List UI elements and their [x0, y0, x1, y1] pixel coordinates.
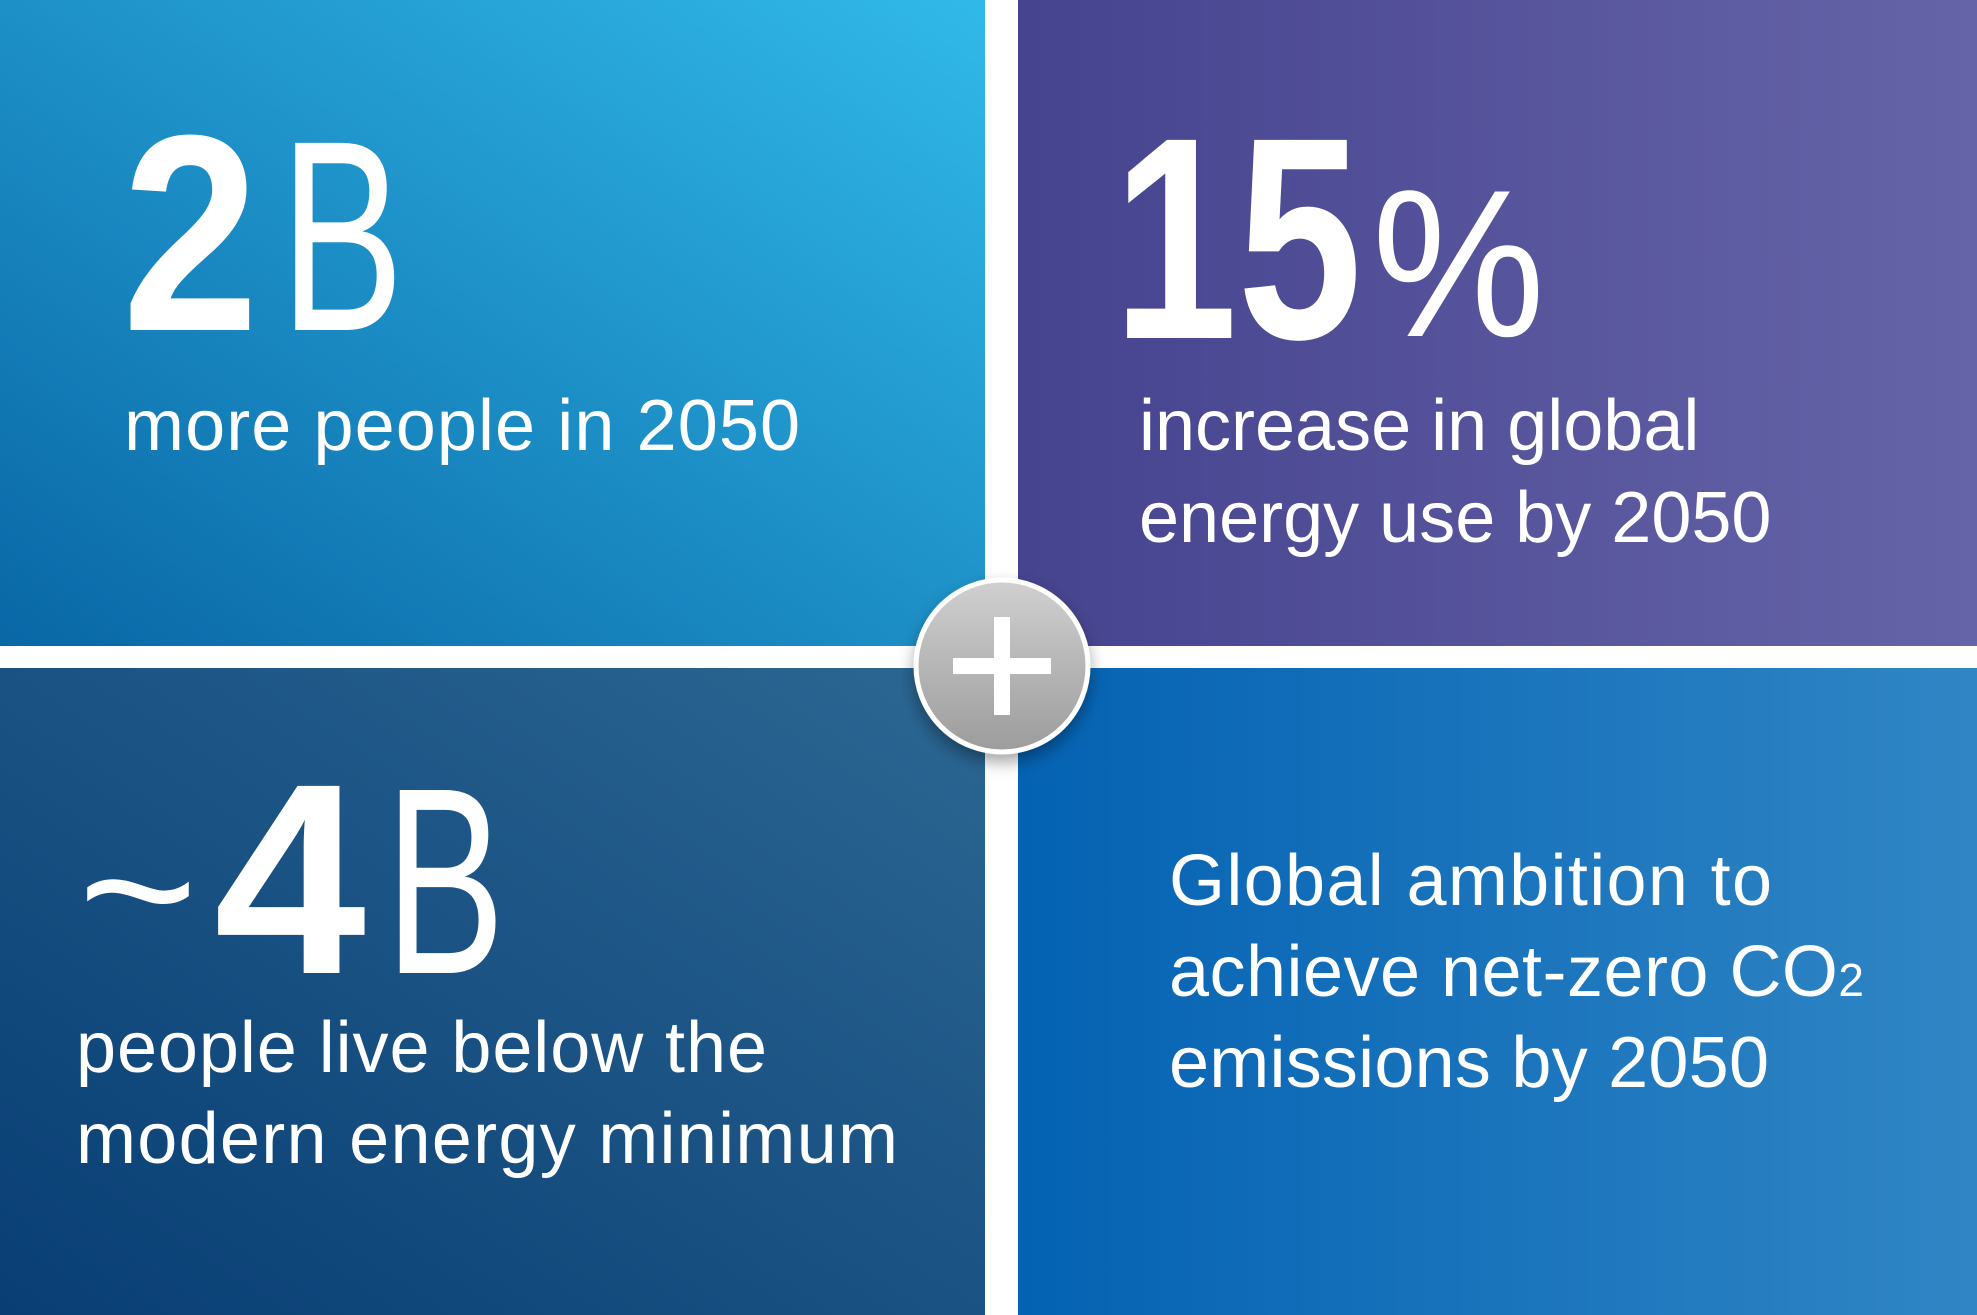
headline: 15%: %	[1372, 146, 1545, 381]
icon: plus circle	[916, 580, 1088, 752]
headline: ~4B: 4	[214, 727, 368, 1031]
text: people live below: modern energy minimum	[76, 1099, 898, 1179]
text: increase in global energy use: energy use by 2050	[1139, 478, 1771, 558]
panel: top-right energy	[1018, 0, 1977, 646]
panel: bottom-right net zero	[1018, 668, 1977, 1315]
headline: ~4B: ~	[78, 778, 198, 1001]
panel: top-left population	[0, 0, 985, 646]
text: people live below	[76, 1008, 898, 1179]
headline: ~4B: B	[385, 733, 505, 1030]
text: people live below: people live below the	[76, 1008, 767, 1088]
text: global ambition: Global ambition to	[1169, 841, 1772, 921]
text: more people in 2050: more people in 2050	[124, 386, 800, 466]
text: global ambition: emissions by 2050	[1169, 1023, 1769, 1103]
headline: 15%: 15	[1113, 78, 1362, 400]
headline: ~4B	[78, 727, 505, 1031]
text: global ambition	[1169, 841, 1864, 1103]
headline: 2B: B	[280, 84, 404, 388]
headline: 2B: 2	[122, 78, 259, 390]
panel: bottom-left energy poverty	[0, 668, 985, 1315]
headline: 2B	[122, 78, 404, 390]
text: global ambition: achieve net-zero CO2	[1169, 932, 1864, 1012]
text: increase in global energy use: increase in global	[1139, 386, 1699, 466]
